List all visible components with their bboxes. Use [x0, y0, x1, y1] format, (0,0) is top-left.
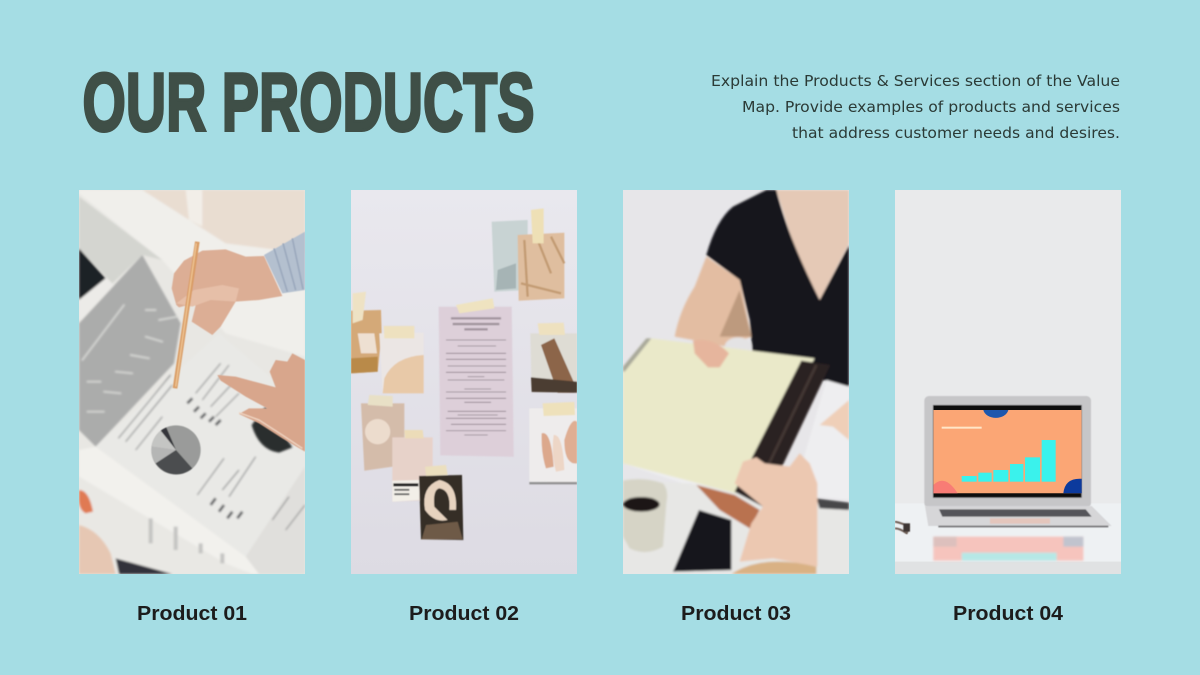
title: OUR PRODUCTS: [82, 56, 534, 148]
sleeve: [264, 232, 305, 293]
label: product 01: Product 01: [137, 603, 247, 625]
label: product 03: Product 03: [681, 603, 791, 625]
cream folder page: [623, 338, 815, 493]
phone: [673, 510, 731, 572]
coffee cup: [623, 479, 667, 552]
arm: [675, 257, 751, 347]
laptop base: [925, 506, 1112, 527]
laptop screen: [933, 410, 1082, 494]
laptop lid: [924, 396, 1091, 508]
panel: product 04 photo, laptop with chart: [895, 190, 1121, 574]
description text: Map. Provide examples of products and services: [742, 98, 1120, 116]
label: product 04: Product 04: [953, 603, 1064, 625]
glasses: [895, 522, 910, 533]
reflection: [933, 537, 1083, 561]
hand with folder: [735, 453, 817, 567]
swatch card: [392, 437, 433, 502]
pencil: [175, 242, 197, 388]
top right photos: [492, 220, 528, 292]
black top: [706, 190, 849, 387]
description text: that address customer needs and desires.: [792, 124, 1120, 142]
panel: product 01 photo, documents and hands: [79, 190, 305, 574]
dark spine: [735, 361, 830, 507]
pointing hand: [217, 353, 305, 452]
label: product 02: Product 02: [409, 603, 519, 625]
right photos: [530, 333, 577, 393]
left photos: [351, 310, 382, 373]
dark circle under hand: [252, 407, 292, 453]
panel: product 02 photo, moodboard: [351, 190, 577, 574]
description text: Explain the Products & Services section of the Value: [711, 72, 1120, 90]
white table and papers: [623, 380, 849, 500]
panel: product 03 photo, handing over a folder: [623, 190, 849, 574]
dark arch photo: [419, 475, 463, 540]
right hand at back: [820, 400, 849, 440]
centre sheet: [439, 307, 514, 457]
pie chart: [151, 425, 201, 475]
hand holding pencil: [172, 249, 282, 335]
description text: [711, 72, 1120, 142]
neck and chest: [776, 190, 849, 300]
